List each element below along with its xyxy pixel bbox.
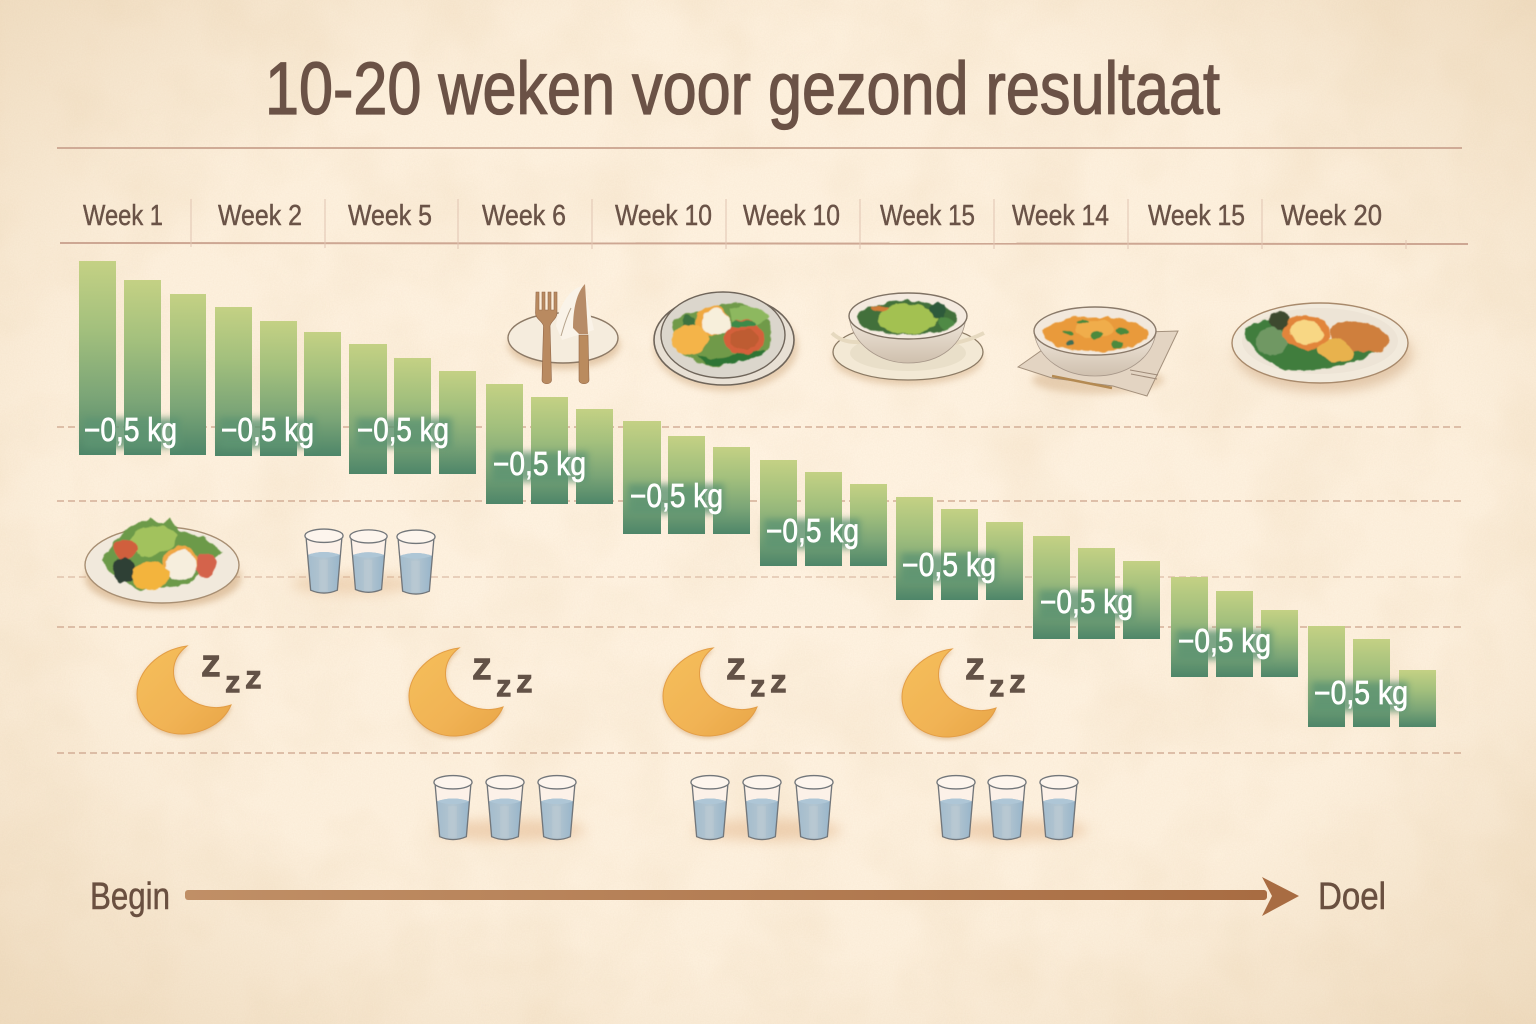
icon: moon with zzz 2 bbox=[409, 648, 532, 736]
icon: orange soup bowl on napkin bbox=[1018, 307, 1178, 396]
icon: salad plate left bbox=[85, 517, 241, 608]
icon: moon with zzz 1 bbox=[137, 646, 261, 734]
glass bbox=[350, 530, 387, 592]
glass bbox=[743, 776, 781, 840]
icon: moon with zzz 3 bbox=[663, 648, 786, 736]
weight labels: −0,5 kg bbox=[630, 477, 723, 514]
icon: moon with zzz 2: Z bbox=[517, 671, 532, 698]
bars week 1 bbox=[79, 261, 206, 455]
bars week 10 bbox=[623, 421, 750, 534]
icon: three water glasses group 4 bbox=[937, 776, 1088, 841]
icon: moon with zzz 2: Z bbox=[473, 654, 491, 686]
title: 10-20 weken voor gezond resultaat bbox=[265, 47, 1220, 130]
week labels: Week 10 bbox=[615, 200, 712, 232]
goal label: Doel bbox=[1318, 876, 1386, 918]
bars week 10 second bbox=[760, 460, 887, 566]
week labels: Week 10 bbox=[743, 200, 840, 232]
weight labels: −0,5 kg bbox=[766, 512, 859, 549]
week labels: Week 20 bbox=[1281, 200, 1382, 232]
icon: moon with zzz 4: Z bbox=[1010, 671, 1025, 698]
icon: plate with citrus and patty bbox=[1232, 303, 1412, 392]
weight labels: −0,5 kg bbox=[357, 411, 449, 448]
icon: moon with zzz 4: Z bbox=[990, 676, 1003, 701]
weight labels: −0,5 kg bbox=[1178, 622, 1271, 659]
weight labels bbox=[84, 411, 1408, 711]
icon: three water glasses group 2 bbox=[434, 776, 585, 841]
week labels: Week 15 bbox=[1148, 200, 1245, 232]
week labels: Week 5 bbox=[348, 200, 432, 232]
glass bbox=[795, 776, 833, 840]
bars week 14 bbox=[1033, 536, 1160, 639]
weight labels: −0,5 kg bbox=[84, 411, 177, 448]
icon: moon with zzz 3: Z bbox=[751, 676, 764, 701]
timeline axis bbox=[60, 199, 1468, 249]
weight labels: −0,5 kg bbox=[221, 411, 314, 448]
icon: moon with zzz 1: Z bbox=[246, 667, 261, 694]
icon: moon with zzz 3: Z bbox=[771, 671, 786, 698]
week labels: Week 15 bbox=[880, 200, 975, 232]
week labels: Week 1 bbox=[83, 200, 163, 232]
icon: moon with zzz 2: Z bbox=[497, 676, 510, 701]
weight labels: −0,5 kg bbox=[493, 445, 586, 482]
glass bbox=[486, 776, 524, 840]
bars week 6 bbox=[486, 384, 613, 504]
icon: moon with zzz 1: Z bbox=[226, 672, 239, 697]
bars week 5 bbox=[349, 344, 476, 474]
weight loss bar chart bbox=[79, 261, 1436, 727]
glass bbox=[538, 776, 576, 840]
weight labels: −0,5 kg bbox=[1040, 583, 1133, 620]
glass bbox=[305, 529, 343, 593]
icon: moon with zzz 4 bbox=[902, 649, 1025, 737]
icon: soup bowl with greens bbox=[832, 293, 984, 385]
icon: moon with zzz 4: Z bbox=[966, 654, 984, 686]
bars week 2 bbox=[215, 307, 341, 456]
week labels: Week 2 bbox=[218, 200, 302, 232]
glass bbox=[988, 776, 1026, 840]
week labels: Week 14 bbox=[1012, 200, 1109, 232]
weight labels: −0,5 kg bbox=[902, 546, 996, 583]
icon: salad plate bbox=[654, 292, 798, 391]
weight labels: −0,5 kg bbox=[1314, 674, 1408, 711]
begin label: Begin bbox=[90, 876, 170, 918]
week labels: Week 6 bbox=[482, 200, 566, 232]
bars week 15 bbox=[896, 497, 1023, 600]
bars week 20 bbox=[1308, 626, 1436, 727]
icon: moon with zzz 1: Z bbox=[202, 651, 220, 683]
glass bbox=[434, 776, 472, 840]
icon: three water glasses group 3 bbox=[691, 776, 842, 841]
week labels bbox=[83, 200, 1382, 232]
glass bbox=[397, 530, 435, 594]
icon: cutlery on plate bbox=[508, 284, 620, 384]
glass bbox=[937, 776, 975, 840]
bars week 15 second bbox=[1171, 577, 1298, 677]
icon: moon with zzz 3: Z bbox=[727, 654, 745, 686]
progress arrow bbox=[185, 877, 1299, 916]
glass bbox=[1040, 776, 1078, 840]
glass bbox=[691, 776, 729, 840]
icon: three water glasses row 1 bbox=[293, 529, 435, 594]
